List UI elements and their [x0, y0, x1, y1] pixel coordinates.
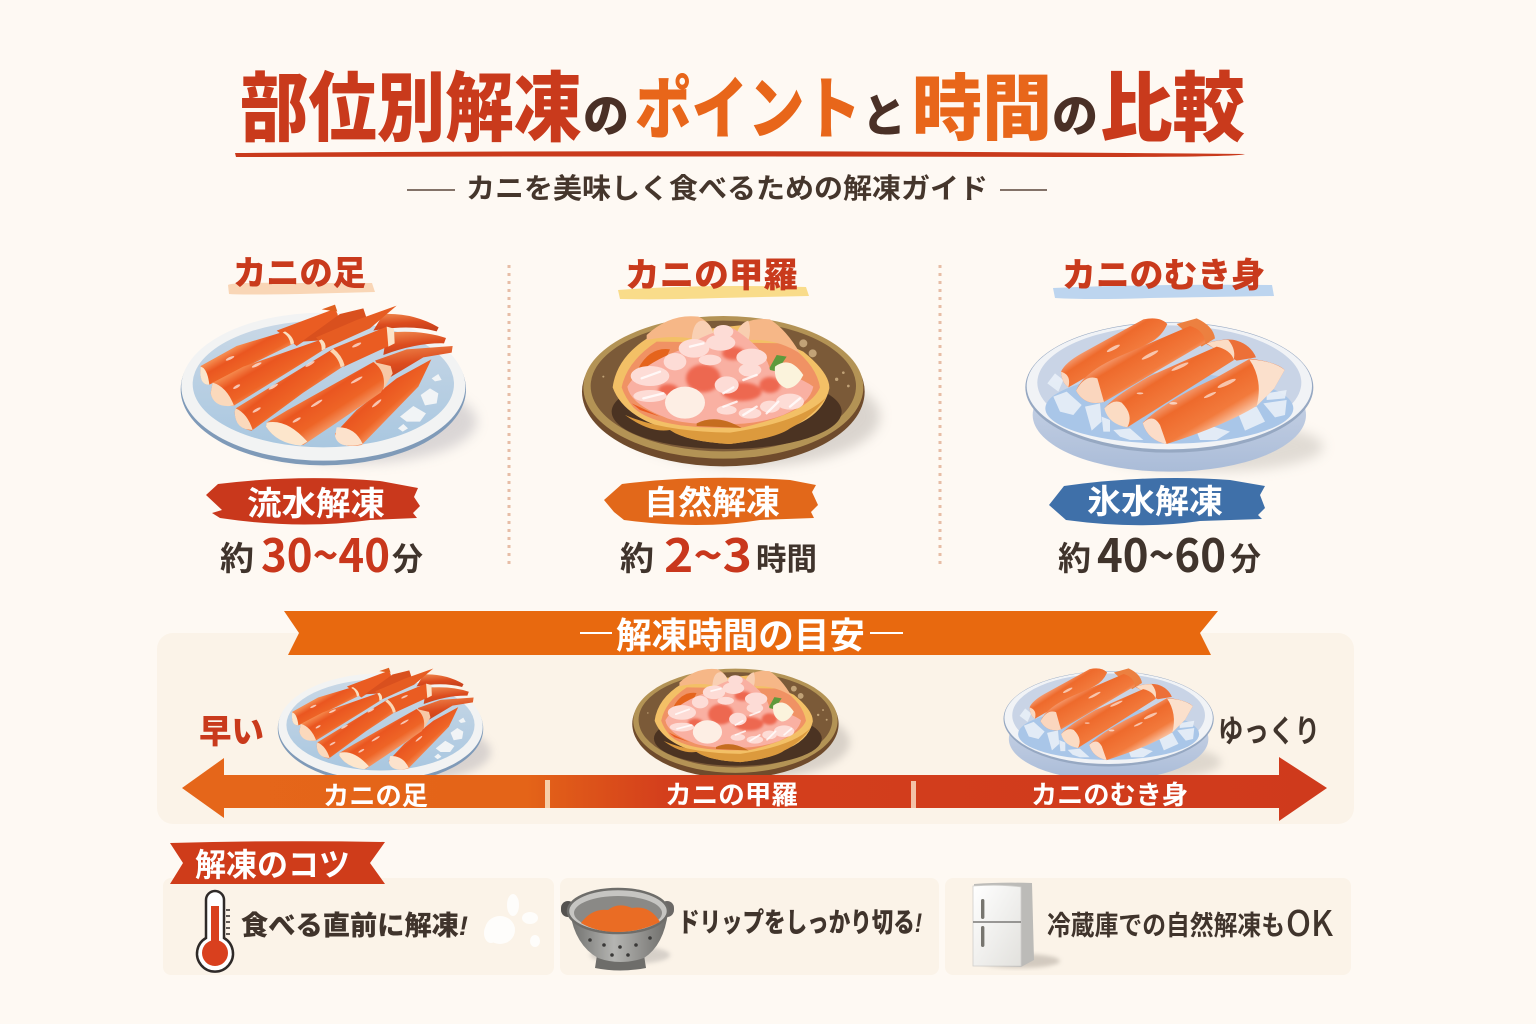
time: 30 to 40 minutes: 30~40 — [261, 520, 390, 586]
tip text: drain the drip: ドリップをしっかり切る! — [678, 908, 922, 938]
icon: colander — [561, 889, 674, 970]
time: 30 to 40 minutes: 分 — [392, 541, 423, 577]
time: 40 to 60 minutes: 約 — [1058, 540, 1091, 577]
heading: crab legs: カニの足 — [233, 255, 366, 293]
badge: running water thaw: 流水解凍 — [247, 485, 385, 522]
icon: refrigerator — [973, 883, 1060, 968]
arrow label: legs: カニの足 — [323, 781, 428, 811]
illustration: small crab shell — [632, 669, 850, 779]
illustration: crab legs on blue plate — [181, 305, 477, 465]
tip text: ok: OK — [1286, 896, 1334, 947]
title: の — [1052, 90, 1098, 142]
divider right — [938, 265, 942, 565]
arrow: time scale — [182, 757, 1327, 821]
icon: thermometer — [197, 891, 233, 972]
illustration: small crab legs — [278, 668, 491, 783]
ribbon: thaw time guide — [284, 611, 1218, 656]
title: の — [583, 90, 629, 142]
illustration: small crab meat — [1003, 668, 1221, 780]
panel: crab legs — [181, 255, 477, 586]
title: 時間 — [912, 70, 1052, 150]
panel: crab meat — [1025, 257, 1323, 586]
card: tip 3 — [945, 878, 1351, 975]
title: ポイント — [635, 72, 861, 148]
scale tick left — [545, 780, 550, 808]
time: 30 to 40 minutes: 約 — [220, 540, 254, 577]
label: slow: ゆっくり — [1218, 714, 1320, 749]
time: 40 to 60 minutes — [1058, 520, 1261, 586]
title — [240, 67, 1245, 152]
heading: crab shell: カニの甲羅 — [625, 257, 798, 295]
time: 2 to 3 hours: 2~3 — [664, 520, 752, 586]
icon: steam puffs — [484, 894, 540, 947]
badge: ice water thaw: 氷水解凍 — [1087, 483, 1223, 520]
ribbon: thaw tips — [170, 841, 385, 884]
card: tip 2 — [560, 878, 939, 975]
scale tick right — [911, 781, 916, 808]
heading: crab meat: カニのむき身 — [1062, 257, 1265, 295]
time: 40 to 60 minutes: 分 — [1230, 541, 1261, 577]
time: 2 to 3 hours — [620, 520, 817, 586]
title: と — [862, 90, 906, 142]
time: 2 to 3 hours: 時間 — [756, 542, 817, 577]
arrow label: meat: カニのむき身 — [1031, 780, 1188, 810]
title: 部位別解凍 — [240, 67, 582, 152]
divider left — [508, 265, 510, 565]
card: tip 1 — [163, 878, 554, 975]
time: 2 to 3 hours: 約 — [620, 540, 654, 577]
illustration: crab shell on wooden plate — [582, 316, 880, 467]
subtitle: カニを美味しく食べるための解凍ガイド — [466, 173, 988, 204]
badge: natural thaw — [604, 478, 818, 525]
badge: natural thaw: 自然解凍 — [644, 484, 780, 521]
badge: ice water thaw — [1049, 478, 1265, 525]
panel: crab shell — [582, 257, 880, 586]
panel: thaw time scale — [157, 633, 1354, 824]
time: 30 to 40 minutes — [220, 520, 423, 586]
arrow label: shell: カニの甲羅 — [665, 780, 798, 810]
label: fast: 早い — [199, 713, 264, 750]
illustration: crab meat on ice — [1025, 318, 1323, 472]
ribbon: thaw tips: 解凍のコツ — [195, 847, 350, 883]
title: 比較 — [1100, 67, 1245, 152]
title underline — [235, 151, 1245, 157]
badge: running water thaw — [206, 478, 420, 525]
tip text: fridge thaw: 冷蔵庫での自然解凍も — [1047, 911, 1285, 941]
time: 40 to 60 minutes: 40~60 — [1097, 520, 1226, 586]
ribbon: thaw time guide: 解凍時間の目安 — [616, 615, 865, 656]
tip text: thaw right before eating: 食べる直前に解凍! — [241, 911, 468, 941]
